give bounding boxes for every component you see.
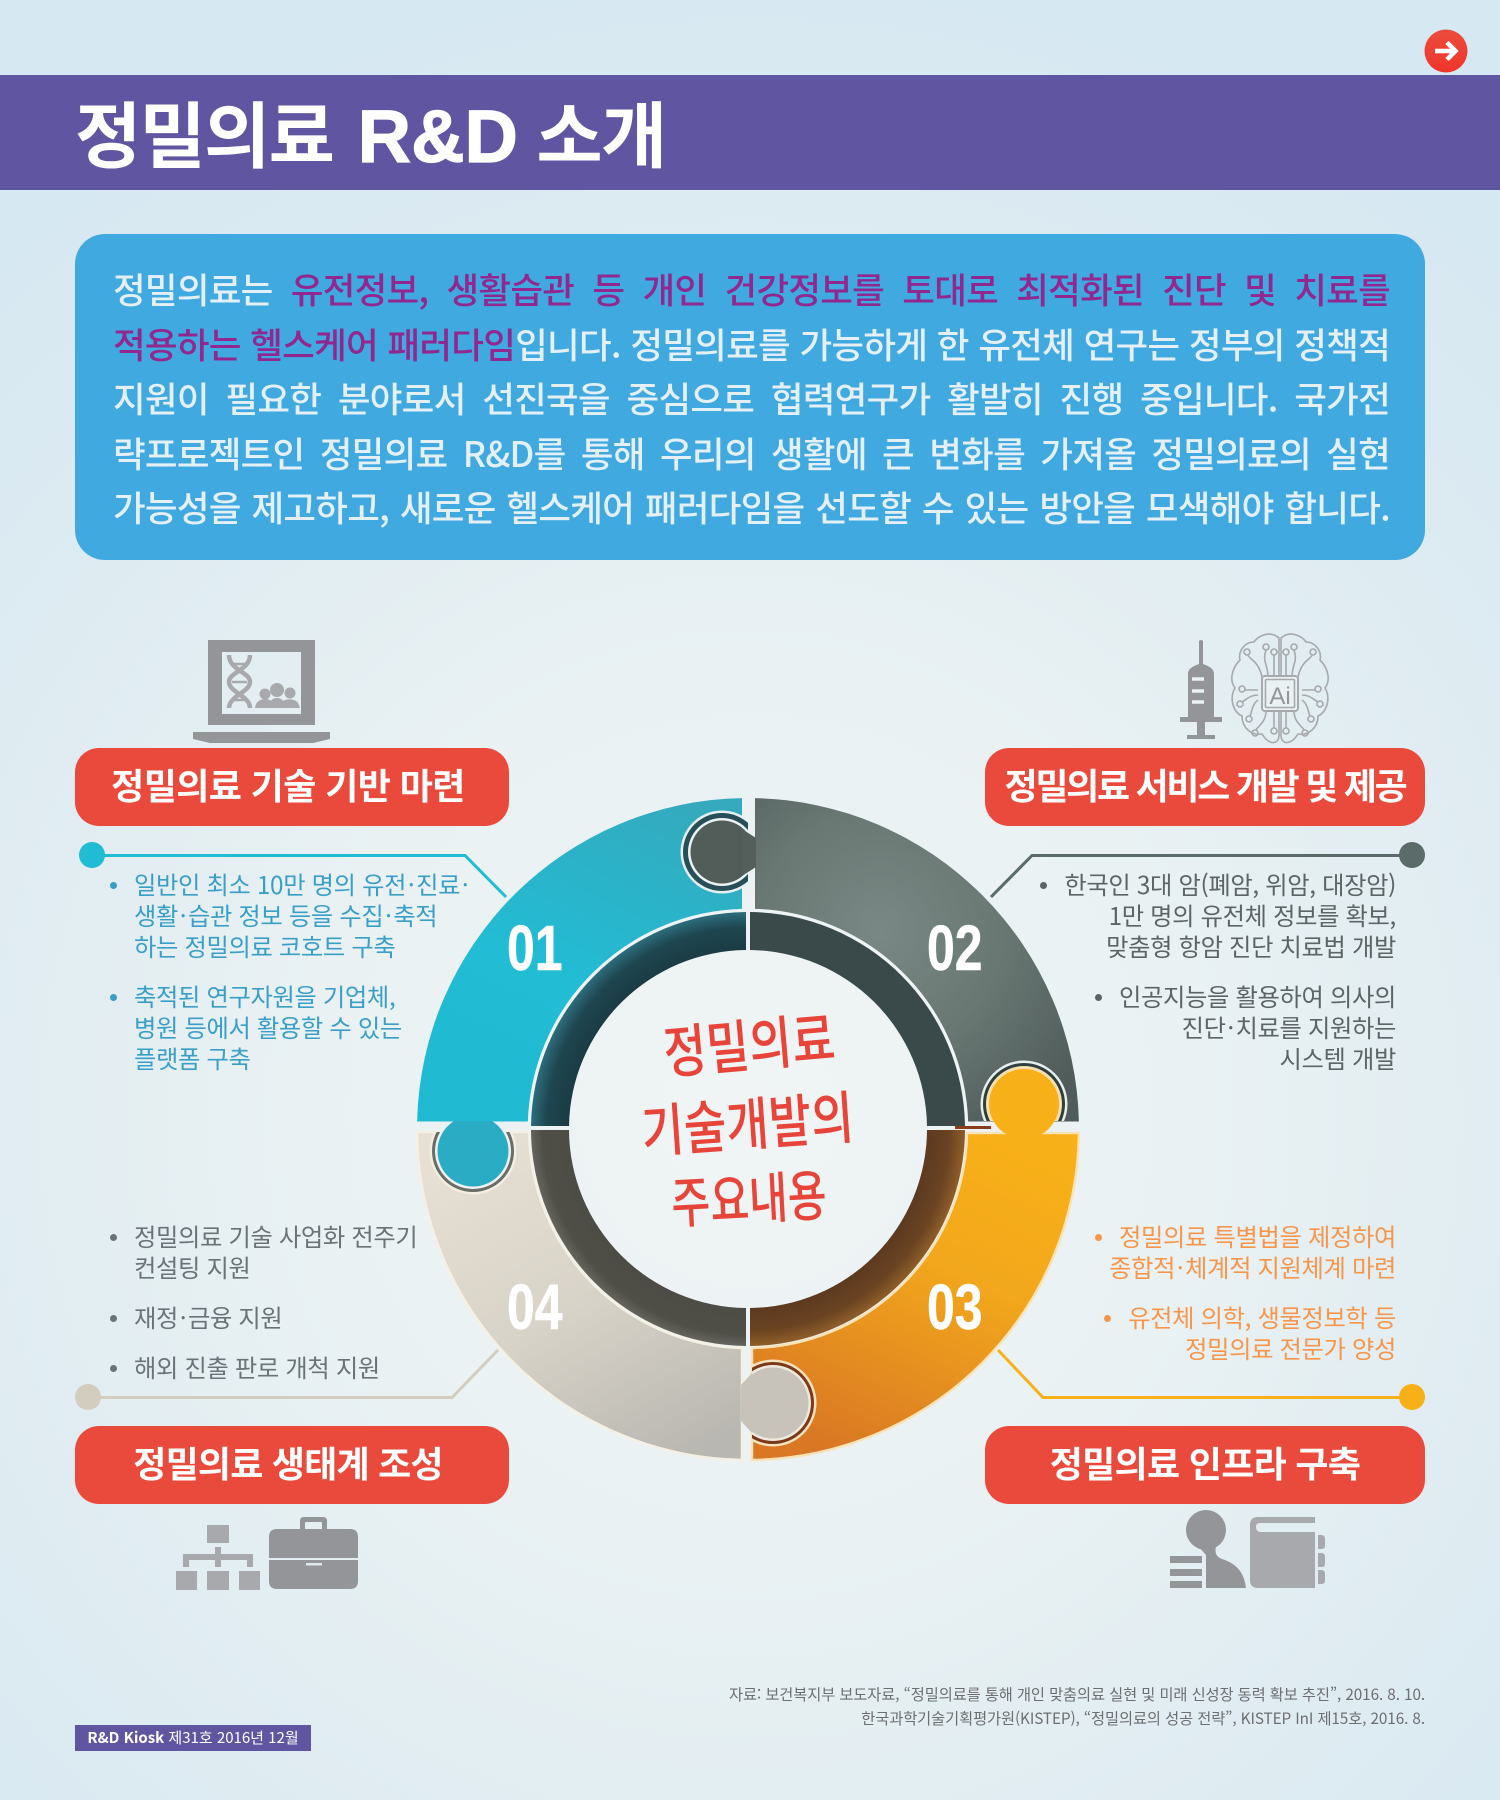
text block: section 01 details: 병원 등에서 활용할 수 있는 [134,1009,402,1044]
text block: section 04 details: 재정·금융 지원 [134,1299,282,1334]
connector: 01 [79,842,507,898]
icon: syringe and AI brain: Ai [1269,683,1291,710]
title: 정밀의료 R&D 소개 [75,78,666,183]
heading: ecosystem: 정밀의료 생태계 조성 [133,1436,443,1488]
panel: introduction text box [75,234,1425,560]
text block: section 01 details: 플랫폼 구축 [134,1040,250,1075]
text block: section 03 details: 종합적·체계적 지원체계 마련 [1109,1249,1396,1284]
icon: red arrow button [1424,30,1468,72]
text block: section 01 details: 하는 정밀의료 코호트 구축 [134,928,395,963]
icon: syringe and AI brain [1180,633,1329,744]
chart: four-part puzzle ring [416,798,1080,1462]
connector: 03 [997,1349,1425,1410]
text block: section 01 details: 생활·습관 정보 등을 수집·축적 [134,897,437,932]
intro paragraph: 략프로젝트인 정밀의료 R&D를 통해 우리의 생활에 큰 변화를 가져올 정밀의료의 실현 [113,426,1390,478]
heading: ecosystem [75,1426,509,1504]
number 03: 03 [927,1272,983,1343]
text block: section 01 details [110,866,468,1075]
publication badge: R&D Kiosk 제31호 2016년 12월 [87,1727,299,1748]
source note: 자료: 보건복지부 보도자료, “정밀의료를 통해 개인 맞춤의료 실현 및 미래 신성장 동력 확보 추진”, 2016. 8. 10. [729,1683,1425,1705]
number 04: 04 [507,1272,563,1343]
puzzle knob: right [955,1060,1068,1134]
intro paragraph: 적용하는 헬스케어 패러다임입니다. 정밀의료를 가능하게 한 유전체 연구는 정부의 정책적 [113,318,1390,368]
text block: section 03 details [1095,1218,1396,1365]
connector: 02 [990,842,1425,898]
heading: service development: 정밀의료 서비스 개발 및 제공 [1005,758,1405,810]
puzzle knob: bottom [741,1360,816,1446]
heading: service development [985,748,1425,826]
text block: section 03 details: 정밀의료 특별법을 제정하여 [1119,1218,1396,1253]
text block: section 04 details: 컨설팅 지원 [134,1249,250,1284]
intro paragraph: 지원이 필요한 분야로서 선진국을 중심으로 협력연구가 활발히 진행 중입니다. 국가전 [113,372,1390,423]
text block: section 02 details: 한국인 3대 암(폐암, 위암, 대장암) [1064,866,1396,901]
number 01: 01 [507,913,563,984]
number 02: 02 [927,913,983,984]
connector: 04 [75,1349,499,1410]
text block: section 04 details: 해외 진출 판로 개척 지원 [134,1349,380,1384]
center handwritten title: 주요내용 [669,1152,828,1240]
source note [729,1683,1425,1728]
puzzle piece 03 [750,1130,1079,1460]
puzzle piece 04 [417,1130,746,1460]
puzzle piece 01 [417,798,746,1126]
heading: technology base [75,748,509,826]
heading: technology base: 정밀의료 기술 기반 마련 [111,758,465,810]
intro paragraph: 정밀의료는 유전정보, 생활습관 등 개인 건강정보를 토대로 최적화된 진단 및 치료를 [113,263,1390,314]
intro paragraph: 가능성을 제고하고, 새로운 헬스케어 패러다임을 선도할 수 있는 방안을 모색해야 합니다. [113,481,1390,532]
text block: section 02 details [1040,866,1396,1075]
text block: section 02 details: 인공지능을 활용하여 의사의 [1119,978,1396,1013]
text block: section 02 details: 맞춤형 항암 진단 치료법 개발 [1106,928,1396,963]
puzzle knob: left [430,1121,516,1194]
center handwritten title: 정밀의료 [660,993,838,1091]
puzzle knob: top [680,810,764,894]
text block: section 01 details: 일반인 최소 10만 명의 유전·진료· [134,866,468,901]
source note: 한국과학기술기획평가원(KISTEP), “정밀의료의 성공 전략”, KISTEP InI 제15호, 2016. 8. [861,1706,1425,1728]
text block: section 02 details: 진단·치료를 지원하는 [1182,1009,1396,1044]
text block: section 04 details: 정밀의료 기술 사업화 전주기 [134,1218,417,1253]
center handwritten title: 기술개발의 [638,1072,856,1169]
text block: section 03 details: 유전체 의학, 생물정보학 등 [1128,1299,1396,1334]
puzzle piece 02 [750,798,1079,1126]
text block: section 02 details: 시스템 개발 [1280,1040,1396,1075]
text block: section 02 details: 1만 명의 유전체 정보를 확보, [1109,897,1396,932]
text block: section 03 details: 정밀의료 전문가 양성 [1185,1330,1396,1365]
icon: org chart and briefcase [176,1517,358,1590]
title banner [0,75,1500,190]
heading: infrastructure [985,1426,1425,1504]
text block: section 01 details: 축적된 연구자원을 기업체, [134,978,395,1013]
icon: person and notebook [1170,1510,1325,1588]
center handwritten title [638,993,856,1240]
intro paragraph [113,263,1390,532]
text block: section 04 details [110,1218,417,1384]
icon: laptop with DNA and people [193,640,330,743]
heading: infrastructure: 정밀의료 인프라 구축 [1050,1436,1360,1488]
